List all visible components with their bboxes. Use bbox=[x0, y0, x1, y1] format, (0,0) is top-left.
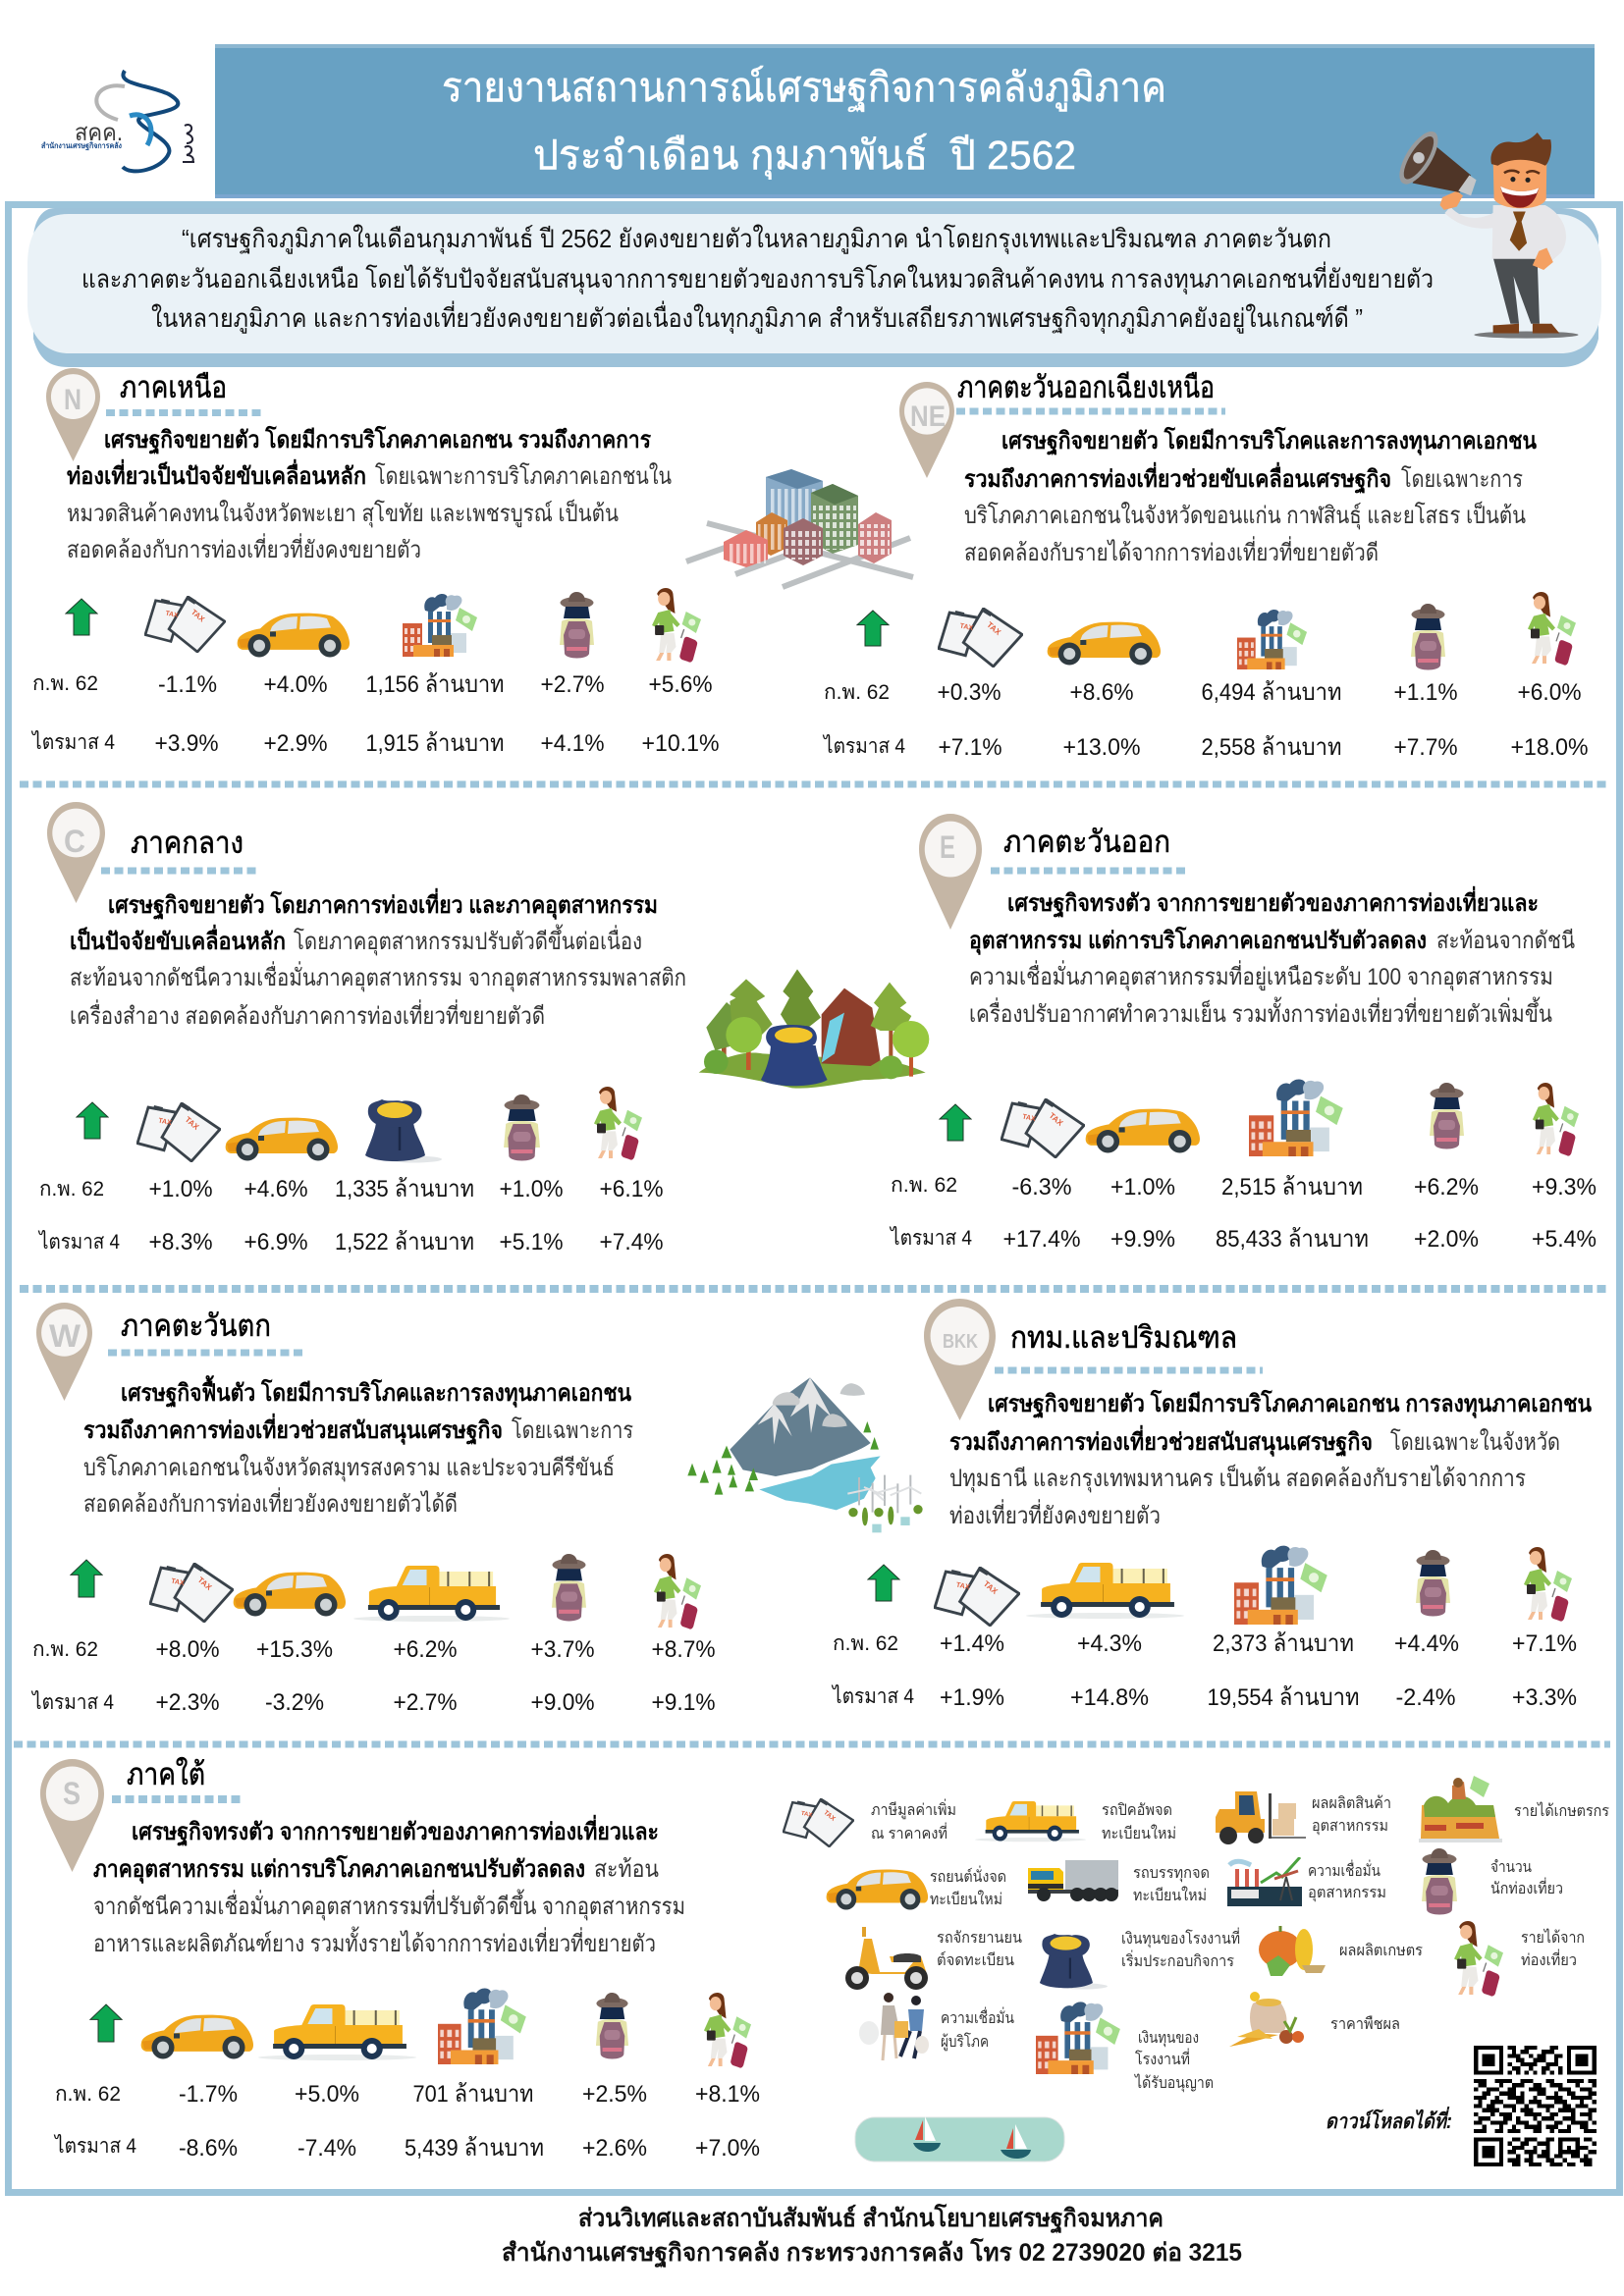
indicator values: -6.3% bbox=[1011, 1174, 1072, 1201]
heading: ภาคใต้ bbox=[127, 1757, 205, 1791]
indicator icons bbox=[857, 592, 1576, 669]
icon: pin N bbox=[46, 368, 100, 461]
indicator values: +8.3% bbox=[149, 1229, 212, 1255]
footer bbox=[502, 2203, 1242, 2269]
legend: new factory capital: เงินทุนของโรงงานที่ bbox=[1121, 1927, 1240, 1949]
QR code bbox=[1474, 2046, 1597, 2166]
indicator values: -2.4% bbox=[1396, 1684, 1455, 1711]
intro text: ในหลายภูมิภาค และการท่องเที่ยวยังคงขยายตัวต่อเนื่องในทุกภูมิภาค สำหรับเสถียรภาพเศรษฐกิจทุกภูมิภาคยังอยู่ในเกณฑ์ดี ” bbox=[151, 300, 1363, 334]
indicator values: ไตรมาส 4 bbox=[53, 2134, 136, 2158]
intro text bbox=[81, 224, 1434, 334]
legend: VAT: ภาษีมูลค่าเพิ่ม bbox=[871, 1798, 956, 1820]
icon: pin S bbox=[40, 1759, 104, 1872]
indicator values: +2.5% bbox=[582, 2081, 647, 2108]
indicator values: 2,515 ล้านบาท bbox=[1221, 1174, 1363, 1201]
body text: ท่องเที่ยวที่ยังคงขยายตัว bbox=[949, 1499, 1161, 1529]
indicator values: +5.1% bbox=[499, 1229, 564, 1255]
body text bbox=[70, 887, 686, 1030]
legend: consumer confidence bbox=[859, 1993, 1014, 2060]
indicator values: +1.0% bbox=[149, 1176, 212, 1202]
indicator values: +14.8% bbox=[1070, 1684, 1149, 1711]
body text: เครื่องสำอาง สอดคล้องกับภาคการท่องเที่ยวที่ขยายตัวดี bbox=[70, 999, 545, 1030]
indicator values: +7.0% bbox=[695, 2135, 760, 2162]
indicator values: +9.3% bbox=[1532, 1174, 1597, 1201]
body text bbox=[67, 425, 672, 563]
indicator values: +8.7% bbox=[652, 1636, 715, 1663]
legend: tourism income: รายได้จาก bbox=[1521, 1928, 1585, 1947]
indicator values: +9.1% bbox=[652, 1689, 715, 1716]
indicator values: +2.6% bbox=[582, 2135, 647, 2162]
body text: อุตสาหกรรม แต่การบริโภคภาคเอกชนปรับตัวลดลง bbox=[969, 926, 1427, 956]
indicator icons bbox=[71, 1554, 701, 1629]
body text: โดยเฉพาะการ bbox=[512, 1416, 633, 1444]
footer: สำนักงานเศรษฐกิจการคลัง กระทรวงการคลัง โทร 02 2739020 ต่อ 3215 bbox=[502, 2237, 1242, 2269]
indicator values: ไตรมาส 4 bbox=[889, 1226, 972, 1250]
heading: ภาคตะวันตก bbox=[121, 1308, 271, 1343]
indicator values: ไตรมาส 4 bbox=[822, 734, 905, 758]
panel: northeast bbox=[822, 370, 1589, 761]
indicator values: +3.3% bbox=[1512, 1684, 1577, 1711]
indicator values: 5,439 ล้านบาท bbox=[405, 2135, 544, 2162]
indicator values: +7.1% bbox=[939, 734, 1001, 761]
legend: consumer confidence: ความเชื่อมั่น bbox=[941, 2006, 1014, 2027]
icon: man with megaphone bbox=[1392, 126, 1579, 339]
icon: pin NE: NE bbox=[910, 400, 946, 433]
indicator values: +5.4% bbox=[1532, 1226, 1597, 1253]
legend: industrial output bbox=[1216, 1791, 1391, 1844]
body text: หมวดสินค้าคงทนในจังหวัดพะเยา สุโขทัย และเพชรบูรณ์ เป็นต้น bbox=[67, 499, 619, 528]
legend: farm output: ผลผลิตเกษตร bbox=[1339, 1943, 1423, 1959]
legend: farm output bbox=[1259, 1926, 1423, 1976]
indicator values: +5.0% bbox=[295, 2081, 359, 2108]
indicator values: 1,522 ล้านบาท bbox=[335, 1229, 474, 1255]
body text bbox=[964, 426, 1538, 566]
icon: pin BKK bbox=[924, 1299, 996, 1420]
body text: เศรษฐกิจทรงตัว จากการขยายตัวของภาคการท่องเที่ยวและ bbox=[1007, 885, 1539, 919]
indicator values bbox=[30, 1636, 715, 1716]
body text bbox=[949, 1389, 1593, 1529]
indicator values: +2.0% bbox=[1414, 1226, 1479, 1253]
title line 1: รายงานสถานการณ์เศรษฐกิจการคลังภูมิภาค bbox=[442, 65, 1166, 112]
legend: industrial confidence: ความเชื่อมั่น bbox=[1308, 1859, 1380, 1880]
indicator values: -8.6% bbox=[179, 2135, 238, 2162]
indicator values: +5.6% bbox=[648, 671, 713, 698]
indicator values: +7.1% bbox=[1512, 1630, 1577, 1657]
indicator values: 1,915 ล้านบาท bbox=[365, 730, 505, 757]
indicator values: +6.0% bbox=[1518, 679, 1581, 706]
legend bbox=[784, 1776, 1609, 2093]
intro text: “เศรษฐกิจภูมิภาคในเดือนกุมภาพันธ์ ปี 2562 ยังคงขยายตัวในหลายภูมิภาค นำโดยกรุงเทพและปริมณฑล ภาคตะวันตก bbox=[182, 224, 1331, 254]
section divider bbox=[20, 1285, 1610, 1293]
indicator values: ก.พ. 62 bbox=[32, 1638, 98, 1661]
indicator values: +3.7% bbox=[530, 1636, 595, 1663]
indicator values: +4.1% bbox=[540, 730, 605, 757]
indicator values bbox=[831, 1630, 1577, 1711]
title line 2: ประจำเดือน กุมภาพันธ์ ปี 2562 bbox=[533, 133, 1076, 180]
indicator values: +6.2% bbox=[1414, 1174, 1479, 1201]
body text: ภาคอุตสาหกรรม แต่การบริโภคภาคเอกชนปรับตัวลดลง bbox=[93, 1854, 585, 1885]
icon: pin C bbox=[47, 802, 105, 903]
logo bbox=[41, 71, 194, 171]
indicator values: -7.4% bbox=[298, 2135, 356, 2162]
legend: new factory capital bbox=[1040, 1927, 1240, 1990]
body text: โดยภาคอุตสาหกรรมปรับตัวดีขึ้นต่อเนื่อง bbox=[294, 924, 642, 956]
panel: south bbox=[40, 1757, 760, 2162]
body text: สะท้อนจากดัชนีความเชื่อมั่นภาคอุตสาหกรรม จากอุตสาหกรรมพลาสติก bbox=[70, 961, 686, 992]
indicator values: +1.4% bbox=[940, 1630, 1004, 1657]
indicator values: 2,373 ล้านบาท bbox=[1213, 1630, 1354, 1657]
legend: licensed factory capital: เงินทุนของ bbox=[1138, 2030, 1199, 2048]
indicator values: +9.0% bbox=[530, 1689, 595, 1716]
indicator values: 85,433 ล้านบาท bbox=[1216, 1226, 1369, 1253]
body text: เศรษฐกิจทรงตัว จากการขยายตัวของภาคการท่องเที่ยวและ bbox=[132, 1814, 659, 1847]
body text: โดยเฉพาะการบริโภคภาคเอกชนใน bbox=[375, 462, 672, 490]
indicator values: +15.3% bbox=[256, 1636, 333, 1663]
body text: สอดคล้องกับการท่องเที่ยวที่ยังคงขยายตัว bbox=[67, 533, 421, 563]
indicator values: +4.0% bbox=[263, 671, 328, 698]
body text: รวมถึงภาคการท่องเที่ยวช่วยสนับสนุนเศรษฐกิจ bbox=[949, 1424, 1373, 1458]
body text: เศรษฐกิจขยายตัว โดยมีการบริโภคภาคเอกชน รวมถึงภาคการ bbox=[104, 425, 651, 455]
heading: ภาคตะวันออกเฉียงเหนือ bbox=[957, 370, 1215, 404]
title banner bbox=[215, 44, 1595, 198]
body text bbox=[93, 1814, 685, 1957]
illustration: forest bbox=[699, 969, 929, 1089]
indicator values: +7.4% bbox=[599, 1229, 664, 1255]
indicator values: ก.พ. 62 bbox=[32, 672, 98, 695]
legend: tourists: นักท่องเที่ยว bbox=[1490, 1877, 1563, 1897]
intro text: และภาคตะวันออกเฉียงเหนือ โดยได้รับปัจจัยสนับสนุนจากการขยายตัวของการบริโภคในหมวดสินค้าคงทน การลงทุนภาคเอกชนที่ยังขยายตัว bbox=[81, 261, 1434, 294]
body text: อาหารและผลิตภัณฑ์ยาง รวมทั้งรายได้จากการท่องเที่ยวที่ขยายตัว bbox=[93, 1926, 656, 1957]
icon: pin W: W bbox=[49, 1318, 81, 1354]
body text bbox=[969, 885, 1575, 1028]
legend: industrial output: ผลผลิตสินค้า bbox=[1312, 1794, 1391, 1812]
legend: licensed factory capital: โรงงานที่ bbox=[1135, 2048, 1190, 2068]
panel: north bbox=[30, 368, 720, 757]
indicator values: +2.7% bbox=[540, 671, 605, 698]
panel: bangkok bbox=[831, 1299, 1593, 1711]
legend: truck: รถบรรทุกจด bbox=[1133, 1865, 1210, 1883]
legend: pickup: ทะเบียนใหม่ bbox=[1102, 1824, 1176, 1842]
logo: สคค. bbox=[75, 120, 123, 146]
icon: pin E bbox=[919, 814, 982, 930]
indicator values: +2.7% bbox=[393, 1689, 458, 1716]
indicator values: 1,156 ล้านบาท bbox=[365, 671, 505, 698]
indicator values: ก.พ. 62 bbox=[39, 1178, 104, 1201]
indicator values: +0.3% bbox=[937, 679, 1001, 706]
icon: pin S: S bbox=[63, 1776, 81, 1811]
panel: west bbox=[30, 1303, 715, 1716]
logo: สำนักงานเศรษฐกิจการคลัง bbox=[41, 141, 122, 151]
legend: licensed factory capital: ได้รับอนุญาต bbox=[1133, 2073, 1214, 2093]
indicator icons bbox=[90, 1988, 751, 2068]
indicator values: +4.6% bbox=[244, 1176, 308, 1202]
legend: car bbox=[827, 1865, 1006, 1910]
indicator values: 1,335 ล้านบาท bbox=[335, 1176, 474, 1202]
legend: industrial confidence: อุตสาหกรรม bbox=[1308, 1885, 1386, 1902]
body text: โดยเฉพาะในจังหวัด bbox=[1390, 1428, 1560, 1456]
indicator values: +18.0% bbox=[1510, 734, 1589, 761]
indicator values: 2,558 ล้านบาท bbox=[1202, 734, 1341, 761]
heading: ภาคกลาง bbox=[131, 826, 244, 860]
icon: pin N: N bbox=[64, 384, 81, 416]
legend: car: รถยนต์นั่งจด bbox=[930, 1865, 1006, 1886]
legend: tourism income bbox=[1454, 1921, 1585, 1997]
icon: pin C: C bbox=[64, 824, 85, 859]
legend: industrial confidence bbox=[1227, 1857, 1386, 1906]
indicator values bbox=[30, 671, 720, 757]
legend: tourists bbox=[1422, 1848, 1563, 1914]
body text: เป็นปัจจัยขับเคลื่อนหลัก bbox=[70, 924, 286, 955]
indicator values: ก.พ. 62 bbox=[891, 1174, 957, 1197]
indicator values: +2.9% bbox=[263, 730, 328, 757]
indicator values: +7.7% bbox=[1394, 734, 1457, 761]
legend: motorcycle: รถจักรยานยน bbox=[937, 1930, 1022, 1947]
body text: เศรษฐกิจขยายตัว โดยภาคการท่องเที่ยว และภาคอุตสาหกรรม bbox=[108, 887, 658, 921]
indicator values: +8.6% bbox=[1070, 679, 1133, 706]
indicator values: ไตรมาส 4 bbox=[30, 1690, 114, 1714]
indicator values: +6.1% bbox=[599, 1176, 664, 1202]
indicator values: ไตรมาส 4 bbox=[37, 1230, 120, 1254]
indicator values bbox=[37, 1176, 664, 1255]
body text: รวมถึงภาคการท่องเที่ยวช่วยสนับสนุนเศรษฐกิจ bbox=[83, 1413, 503, 1446]
body text: เศรษฐกิจฟื้นตัว โดยมีการบริโภคและการลงทุนภาคเอกชน bbox=[121, 1374, 632, 1409]
indicator values: 6,494 ล้านบาท bbox=[1202, 679, 1341, 706]
indicator values: +4.3% bbox=[1077, 1630, 1142, 1657]
legend: consumer confidence: ผู้บริโภค bbox=[941, 2032, 989, 2052]
indicator values bbox=[822, 679, 1589, 761]
indicator values: ก.พ. 62 bbox=[833, 1632, 898, 1655]
indicator values bbox=[53, 2081, 760, 2162]
indicator values: +1.0% bbox=[1110, 1174, 1175, 1201]
body text: สะท้อน bbox=[594, 1856, 659, 1883]
indicator values: +6.2% bbox=[393, 1636, 458, 1663]
indicator values: +1.0% bbox=[499, 1176, 564, 1202]
indicator values: 701 ล้านบาท bbox=[412, 2081, 534, 2108]
legend: tourism income: ท่องเที่ยว bbox=[1521, 1949, 1577, 1969]
indicator icons bbox=[77, 1087, 642, 1162]
heading: กทม.และปริมณฑล bbox=[1010, 1320, 1237, 1355]
indicator values: +17.4% bbox=[1003, 1226, 1080, 1253]
illustration: city bbox=[686, 469, 913, 587]
panel: east bbox=[889, 814, 1597, 1253]
legend: farm income bbox=[1419, 1776, 1609, 1842]
indicator values: +1.1% bbox=[1394, 679, 1457, 706]
indicator values: +2.3% bbox=[155, 1689, 220, 1716]
indicator values: +8.0% bbox=[155, 1636, 220, 1663]
body text: รวมถึงภาคการท่องเที่ยวช่วยขับเคลื่อนเศรษฐกิจ bbox=[964, 461, 1391, 495]
body text bbox=[83, 1374, 633, 1518]
indicator icons bbox=[66, 588, 701, 663]
legend: new factory capital: เริ่มประกอบกิจการ bbox=[1121, 1949, 1234, 1970]
indicator values: ก.พ. 62 bbox=[824, 681, 890, 704]
legend: VAT bbox=[784, 1798, 956, 1846]
indicator values: ก.พ. 62 bbox=[55, 2083, 121, 2106]
indicator values: +8.1% bbox=[695, 2081, 760, 2108]
legend: crop prices: ราคาพืชผล bbox=[1330, 2015, 1400, 2033]
body text: จากดัชนีความเชื่อมั่นภาคอุตสาหกรรมที่ปรับตัวดีขึ้น จากอุตสาหกรรม bbox=[93, 1889, 685, 1921]
body text: ปทุมธานี และกรุงเทพมหานคร เป็นต้น สอดคล้องกับรายได้จากการ bbox=[949, 1464, 1526, 1493]
decoration: boats bbox=[855, 2116, 1064, 2162]
heading: ภาคตะวันออก bbox=[1003, 825, 1170, 859]
body text: บริโภคภาคเอกชนในจังหวัดขอนแก่น กาฬสินธุ์ และยโสธร เป็นต้น bbox=[964, 501, 1526, 530]
download label: ดาวน์โหลดได้ที่: bbox=[1326, 2107, 1452, 2133]
indicator values: +6.9% bbox=[244, 1229, 308, 1255]
icon: pin E: E bbox=[940, 829, 955, 865]
body text: เศรษฐกิจขยายตัว โดยมีการบริโภคและการลงทุนภาคเอกชน bbox=[1001, 426, 1538, 456]
legend: motorcycle: ต์จดทะเบียน bbox=[937, 1950, 1014, 1969]
legend: truck: ทะเบียนใหม่ bbox=[1133, 1886, 1207, 1904]
indicator values: ไตรมาส 4 bbox=[30, 730, 115, 754]
indicator icons bbox=[940, 1080, 1579, 1157]
body text: ท่องเที่ยวเป็นปัจจัยขับเคลื่อนหลัก bbox=[67, 458, 366, 490]
heading: ภาคเหนือ bbox=[120, 370, 227, 404]
legend: VAT: ณ ราคาคงที่ bbox=[871, 1822, 947, 1842]
legend: pickup: รถปิคอัพจด bbox=[1102, 1802, 1172, 1819]
indicator values: -1.7% bbox=[179, 2081, 238, 2108]
legend: farm income: รายได้เกษตรกร bbox=[1514, 1801, 1609, 1820]
panel: central bbox=[37, 802, 686, 1255]
indicator values: -3.2% bbox=[265, 1689, 324, 1716]
indicator values: +1.9% bbox=[940, 1684, 1004, 1711]
body text: ความเชื่อมั่นภาคอุตสาหกรรมที่อยู่เหนือระดับ 100 จากอุตสาหกรรม bbox=[969, 960, 1553, 991]
indicator values: 19,554 ล้านบาท bbox=[1208, 1684, 1359, 1711]
body text: โดยเฉพาะการ bbox=[1401, 465, 1523, 493]
intro panel bbox=[27, 208, 1601, 367]
section divider bbox=[20, 781, 1610, 787]
illustration: mountain lake bbox=[687, 1377, 923, 1532]
indicator values: +10.1% bbox=[642, 730, 719, 757]
indicator values: +3.9% bbox=[155, 730, 218, 757]
legend: pickup bbox=[975, 1801, 1176, 1842]
indicator values: +4.4% bbox=[1394, 1630, 1459, 1657]
indicator values: +9.9% bbox=[1110, 1226, 1175, 1253]
icon: pin W bbox=[36, 1303, 92, 1401]
icon: pin BKK: BKK bbox=[943, 1331, 978, 1353]
legend: industrial output: อุตสาหกรรม bbox=[1312, 1818, 1388, 1836]
body text: สอดคล้องกับการท่องเที่ยวยังคงขยายตัวได้ดี bbox=[83, 1487, 458, 1518]
indicator values: -1.1% bbox=[158, 671, 217, 698]
legend: tourists: จำนวน bbox=[1490, 1859, 1532, 1876]
legend: motorcycle bbox=[845, 1927, 1022, 1990]
body text: บริโภคภาคเอกชนในจังหวัดสมุทรสงคราม และประจวบคีรีขันธ์ bbox=[83, 1454, 615, 1482]
indicator values bbox=[889, 1174, 1597, 1253]
body text: สะท้อนจากดัชนี bbox=[1436, 928, 1575, 954]
legend: crop prices bbox=[1229, 1992, 1400, 2047]
footer: ส่วนวิเทศและสถาบันสัมพันธ์ สำนักนโยบายเศรษฐกิจมหภาค bbox=[578, 2203, 1164, 2234]
icon: pin NE bbox=[899, 382, 954, 478]
indicator values: +13.0% bbox=[1062, 734, 1141, 761]
legend: truck bbox=[1028, 1860, 1210, 1904]
body text: สอดคล้องกับรายได้จากการท่องเที่ยวที่ขยายตัวดี bbox=[964, 536, 1379, 566]
indicator values: ไตรมาส 4 bbox=[831, 1684, 914, 1708]
section divider bbox=[14, 1741, 1610, 1747]
indicator icons bbox=[868, 1546, 1572, 1626]
legend: licensed factory capital bbox=[1036, 2002, 1214, 2093]
legend: car: ทะเบียนใหม่ bbox=[930, 1890, 1002, 1908]
